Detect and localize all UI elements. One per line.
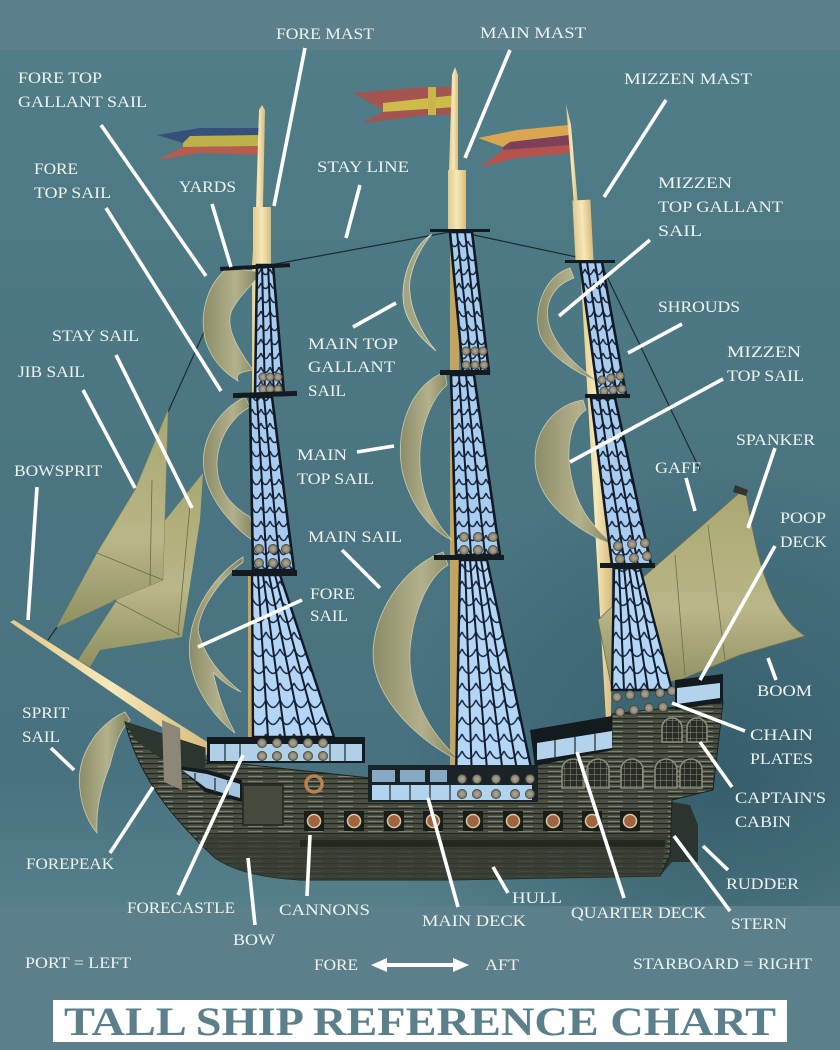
callout: captain's cabin: CABIN — [735, 814, 792, 831]
callout: fore sail: FORE — [310, 586, 355, 603]
mizzen mast pole — [566, 104, 612, 720]
callout: jib sail — [18, 364, 135, 488]
sail: fore top sail — [203, 397, 257, 543]
callout: fore sail: SAIL — [310, 608, 348, 625]
callout: main top gallant sail: MAIN TOP — [308, 336, 398, 353]
main mast pole — [448, 67, 466, 780]
bow rope wrapping — [162, 720, 182, 790]
callout: main mast — [465, 25, 586, 158]
mizzen upper shroud — [580, 262, 626, 395]
cannons — [304, 811, 640, 831]
sail: mizzen top gallant — [538, 268, 597, 381]
callout: hull — [493, 867, 562, 907]
backdrop shadow — [0, 450, 840, 906]
fore mast pole — [248, 105, 271, 740]
callout: mizzen mast: MIZZEN MAST — [624, 71, 752, 88]
callout: captain's cabin — [700, 742, 826, 831]
fore hatch — [243, 785, 283, 825]
callout: hull: HULL — [512, 890, 562, 907]
callout: fore top gallant sail: GALLANT SAIL — [18, 94, 147, 111]
callout: fore top sail: TOP SAIL — [34, 185, 111, 202]
callout: main sail: MAIN SAIL — [308, 529, 402, 546]
callout: sprit sail — [22, 705, 74, 770]
flag: mizzen mast — [478, 125, 573, 167]
callout: main deck: MAIN DECK — [422, 913, 527, 930]
sprit sail — [79, 712, 130, 833]
sail fold lines — [97, 480, 190, 635]
callout: chain plates — [672, 703, 814, 768]
spanker sail — [598, 488, 805, 690]
callout: mizzen top gallant sail — [559, 175, 783, 316]
callout: spanker — [736, 432, 815, 528]
callout: quarter deck: QUARTER DECK — [571, 905, 706, 922]
callout: main top gallant sail: SAIL — [308, 383, 346, 400]
life ring — [306, 776, 322, 792]
forecastle rail — [125, 722, 365, 802]
callout: main mast: MAIN MAST — [480, 25, 586, 42]
double-headed arrow: fore to aft — [371, 958, 469, 972]
deadeye blocks — [254, 346, 652, 568]
callout: jib sail: JIB SAIL — [18, 364, 85, 381]
captain's cabin windows — [562, 718, 707, 788]
flag: main mast — [353, 87, 457, 123]
mizzen lower shroud — [612, 568, 672, 690]
legend: aft label: AFT — [485, 957, 519, 974]
callout: stay line: STAY LINE — [317, 159, 409, 176]
sail: stay sail — [78, 473, 203, 667]
callout: fore top sail — [34, 161, 221, 391]
callout: mizzen top sail: MIZZEN — [727, 344, 802, 361]
flag: fore mast — [157, 128, 262, 160]
callout: bow — [233, 858, 276, 949]
callout: mizzen mast — [604, 71, 752, 197]
title banner: TALL SHIP REFERENCE CHART — [64, 999, 776, 1044]
callout: sprit sail: SPRIT — [22, 705, 69, 722]
fore lower shroud — [252, 575, 334, 737]
callout: fore top gallant sail: FORE TOP — [18, 70, 102, 87]
callout: bow: BOW — [233, 932, 276, 949]
sail: main top gallant — [403, 234, 436, 351]
callout: poop deck — [700, 510, 827, 680]
callout: stay sail — [52, 328, 192, 508]
callout: poop deck: POOP — [780, 510, 826, 527]
callout: mizzen top gallant sail: SAIL — [658, 223, 702, 240]
callout: main top gallant sail: GALLANT — [308, 359, 395, 376]
callout: forecastle — [127, 755, 243, 917]
quarter deck rail — [530, 716, 612, 766]
callout: captain's cabin: CAPTAIN'S — [735, 790, 826, 807]
legend: port: PORT = LEFT — [25, 955, 131, 972]
callout: bowsprit — [14, 463, 102, 620]
fore middle shroud — [250, 397, 294, 570]
mast tops — [220, 229, 655, 576]
callout: quarter deck — [571, 752, 706, 922]
sail: main top sail — [400, 372, 452, 540]
lower shroud deadeyes — [257, 686, 677, 799]
legend: fore label: FORE — [314, 957, 358, 974]
callout: mizzen top gallant sail: MIZZEN — [658, 175, 733, 192]
callout: chain plates: PLATES — [750, 751, 813, 768]
rudder — [660, 800, 698, 876]
fore upper shroud — [255, 265, 284, 395]
stay lines and rigging — [48, 231, 700, 735]
sail: fore sail — [189, 557, 243, 733]
callout: boom: BOOM — [757, 683, 812, 700]
callout: main deck — [422, 798, 527, 930]
callout: gaff: GAFF — [655, 460, 701, 477]
callout: main top sail: MAIN — [297, 447, 348, 464]
spanker seam lines — [675, 525, 725, 675]
callout: shrouds: SHROUDS — [658, 299, 740, 316]
callout: forepeak: FOREPEAK — [26, 856, 114, 873]
callout: rudder: RUDDER — [726, 876, 799, 893]
callout: forecastle: FORECASTLE — [127, 900, 235, 917]
lower hull shading — [195, 835, 668, 880]
callout: fore top gallant sail — [18, 70, 206, 276]
callout: mizzen top sail: TOP SAIL — [727, 368, 804, 385]
callout: chain plates: CHAIN — [750, 727, 814, 744]
callout: mizzen top gallant sail: TOP GALLANT — [658, 199, 783, 216]
ship illustration — [10, 67, 805, 880]
callout: main top sail: TOP SAIL — [297, 471, 374, 488]
callout: forepeak — [26, 787, 153, 873]
main lower shroud — [456, 560, 534, 782]
callout: fore mast — [274, 26, 374, 206]
callout: sprit sail: SAIL — [22, 729, 60, 746]
sail: jib sail — [57, 410, 168, 627]
callout: cannons: CANNONS — [279, 902, 370, 919]
callout: stern — [674, 836, 787, 933]
callout: bowsprit: BOWSPRIT — [14, 463, 102, 480]
legend: starboard: STARBOARD = RIGHT — [633, 956, 812, 973]
callout: fore top sail: FORE — [34, 161, 78, 178]
sail: fore top gallant — [203, 268, 262, 381]
callout: stern: STERN — [731, 916, 787, 933]
main deck rail — [368, 765, 538, 802]
callout: spanker: SPANKER — [736, 432, 815, 449]
callout: gaff — [655, 460, 701, 511]
callout: poop deck: DECK — [780, 534, 827, 551]
callout: stay line — [317, 159, 409, 238]
callout: mizzen top sail — [570, 344, 804, 462]
main middle shroud — [451, 375, 500, 555]
callout: fore sail — [198, 586, 355, 647]
bowsprit — [10, 620, 212, 757]
sail: main sail — [373, 552, 462, 762]
callout: stay sail: STAY SAIL — [52, 328, 139, 345]
callout: shrouds — [628, 299, 740, 353]
sail: mizzen top sail — [535, 400, 616, 546]
callout: main top sail — [297, 446, 394, 488]
callout: cannons — [279, 835, 370, 919]
mizzen middle shroud — [591, 398, 651, 565]
poop deck rail — [675, 674, 723, 710]
callout: fore mast: FORE MAST — [276, 26, 374, 43]
callout: boom — [757, 658, 812, 700]
callout: main top gallant sail — [308, 303, 398, 400]
callout: yards — [179, 179, 236, 267]
hull — [125, 702, 723, 880]
callout: main sail — [308, 529, 402, 588]
callout: yards: YARDS — [179, 179, 236, 196]
main upper shroud — [450, 232, 489, 372]
gaff — [733, 485, 748, 496]
callout: rudder — [703, 846, 799, 893]
waterline wale — [300, 840, 665, 847]
